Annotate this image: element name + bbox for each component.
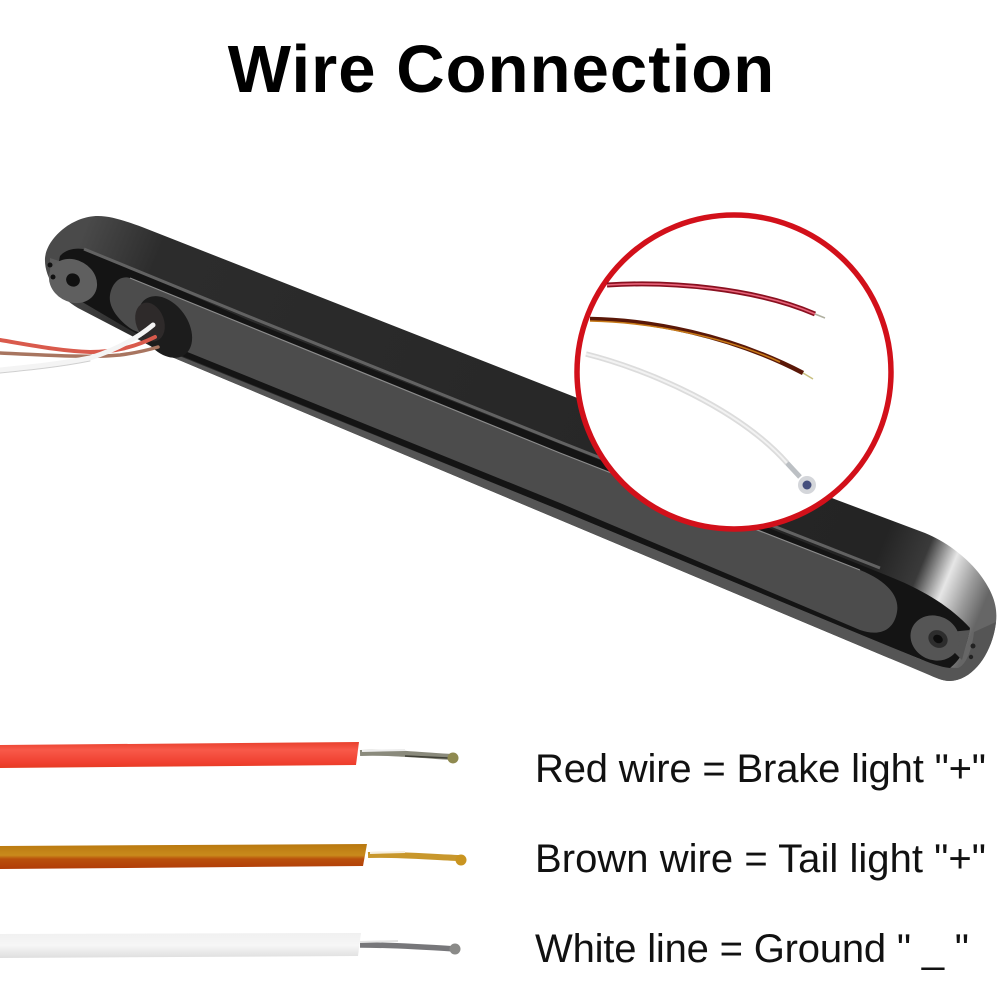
legend: red wire: Red wire = Brake light "+" (535, 747, 986, 791)
light bar (0, 216, 996, 681)
zoomed white wire with ring terminal (586, 354, 816, 494)
upper highlight line (84, 249, 880, 568)
lens pill (110, 277, 897, 633)
black face recess (59, 249, 970, 668)
left mount hub (41, 250, 105, 312)
zoomed red wire (607, 284, 825, 318)
zoomed brown wire (590, 319, 813, 379)
right mount hub (903, 607, 976, 669)
brown sample wire (0, 844, 466, 869)
left wire bundle (0, 325, 158, 373)
bar body (45, 216, 996, 681)
legend: white wire: White line = Ground " _ " (535, 927, 969, 971)
circle (577, 215, 891, 529)
red sample wire (0, 742, 458, 768)
slot highlight line (130, 278, 860, 570)
title: Wire Connection (228, 32, 775, 107)
magnifier callout (577, 215, 891, 529)
white sample wire (0, 933, 460, 958)
rubber grommet (127, 286, 203, 368)
lower grey rim (167, 351, 996, 681)
legend: brown wire: Brown wire = Tail light "+" (535, 837, 986, 881)
